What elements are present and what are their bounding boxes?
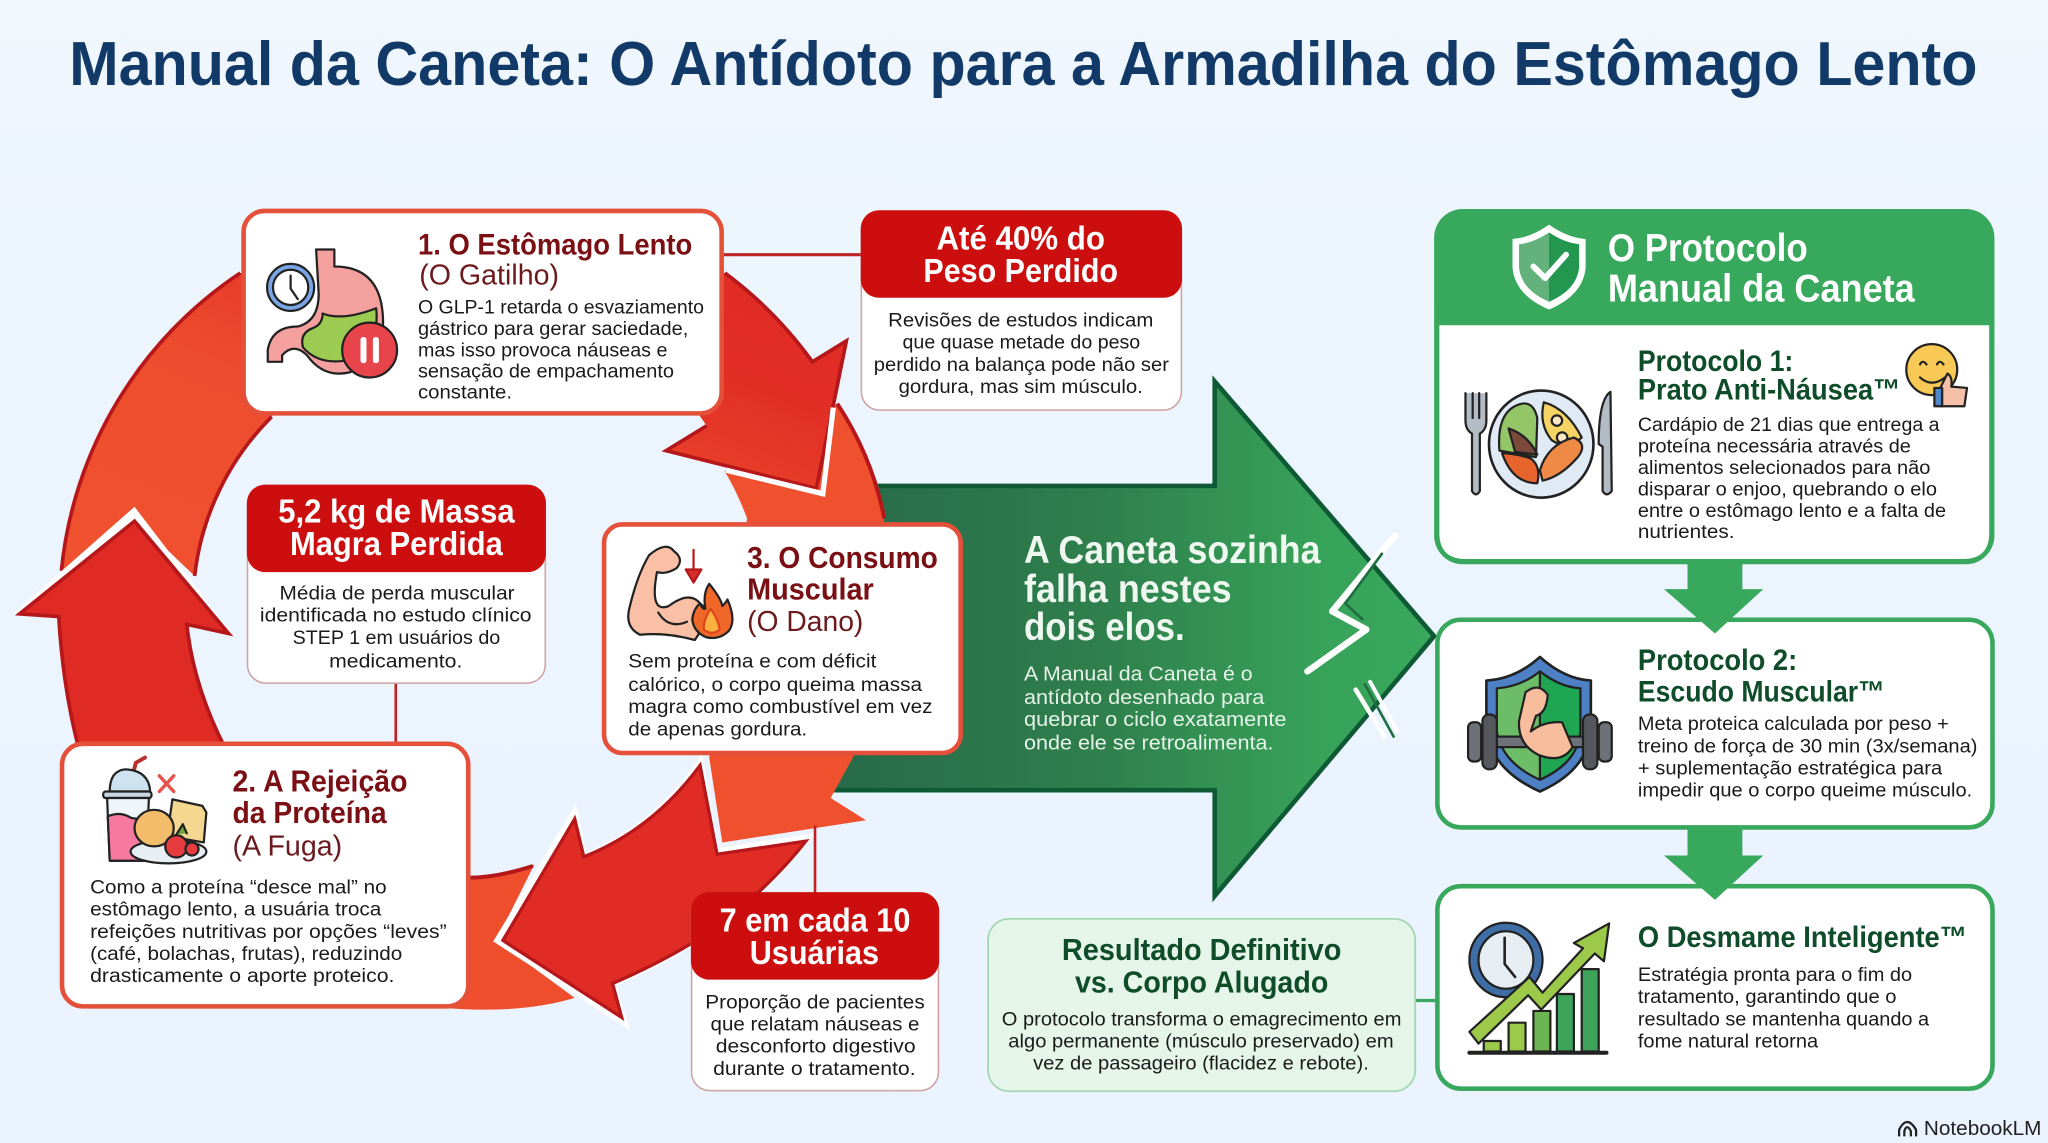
callout header: Até 40% do	[936, 220, 1105, 257]
text: card 1 body: O GLP-1 retarda o esvaziamento	[418, 296, 704, 318]
text: green arrow headline: dois elos.	[1024, 606, 1185, 649]
text: card 3 body: calórico, o corpo queima massa	[628, 674, 923, 696]
arrow: big green transition arrow	[823, 381, 1434, 896]
callout text: Revisões de estudos indicam	[888, 310, 1153, 332]
text: desmame heading: O Desmame Inteligente™	[1638, 921, 1967, 954]
text: card 3 body: Sem proteína e com déficit	[628, 650, 877, 672]
connector: result box to desmame card	[1413, 999, 1438, 1002]
text: card 3 heading: (O Dano)	[747, 606, 863, 638]
text: green arrow body: onde ele se retroalimenta.	[1024, 733, 1273, 755]
callout text	[260, 583, 532, 672]
icon: slow stomach with clock and pause	[267, 249, 397, 377]
text: protocol 2 heading	[1638, 644, 1885, 708]
text: card 1 body: mas isso provoca náuseas e	[418, 340, 667, 362]
text: desmame body: resultado se mantenha quando a	[1638, 1008, 1930, 1030]
text: card 1 subheading: (O Gatilho)	[419, 260, 559, 292]
text: card 1 body: constante.	[418, 381, 512, 403]
text: green arrow body: antídoto desenhado para	[1024, 687, 1265, 709]
icon: clock and rising chart	[1469, 923, 1609, 1053]
text: protocol 1 heading	[1638, 345, 1900, 407]
arrow: red upward arrow from card 2	[13, 507, 232, 747]
panel: 1. O Estômago Lento	[244, 211, 722, 413]
text: card 2 heading	[232, 764, 408, 863]
brand: NotebookLM: NotebookLM	[1924, 1118, 2041, 1140]
panel: Resultado Definitivo vs. Corpo Alugado	[988, 919, 1415, 1091]
text: card 1 heading: 1. O Estômago Lento	[418, 229, 692, 262]
text: desmame body	[1638, 964, 1930, 1053]
text: green arrow headline: A Caneta sozinha	[1024, 529, 1322, 572]
icon: flexed arm with flame	[628, 547, 732, 640]
text: green arrow headline: falha nestes	[1024, 568, 1232, 611]
callout: 7 em cada 10 Usuárias	[691, 892, 939, 1091]
callout header	[691, 892, 939, 980]
callout: Até 40% do Peso Perdido	[861, 210, 1182, 410]
text: card 3 body: magra como combustível em vez	[628, 696, 933, 718]
text: protocol 1 body: nutrientes.	[1638, 521, 1735, 543]
panel: O Protocolo Manual da Caneta	[1434, 209, 1994, 564]
text: card 3 body: de apenas gordura.	[628, 718, 807, 740]
text: green arrow headline	[1024, 529, 1322, 649]
callout text: STEP 1 em usuários do	[293, 627, 500, 649]
title: Manual da Caneta: O Antídoto para a Armadilha do Estômago Lento	[69, 30, 1977, 99]
text: card 1 body: gástrico para gerar saciedade,	[418, 318, 688, 340]
text: result heading	[1062, 932, 1341, 1000]
icon: balanced plate with cutlery	[1465, 391, 1612, 498]
text: card 3 heading	[747, 540, 938, 638]
text: protocol 1 body: Cardápio de 21 dias que entrega a	[1638, 414, 1941, 436]
text: card 1 body	[418, 296, 704, 403]
text: desmame body: Estratégia pronta para o fim do	[1638, 964, 1912, 986]
callout text: Média de perda muscular	[280, 583, 515, 605]
text: result heading: vs. Corpo Alugado	[1075, 965, 1328, 1000]
callout text: desconforto digestivo	[716, 1036, 916, 1058]
callout text: que quase metade do peso	[903, 332, 1140, 354]
text: protocol 2 body: impedir que o corpo queime músculo.	[1638, 780, 1972, 802]
arrow: orange tail behind card 2	[451, 865, 575, 1010]
icon: smiley thumbs up	[1906, 344, 1967, 406]
connector: lean mass callout to card 2	[395, 679, 397, 744]
text: card 2 body: drasticamente o aporte proteico.	[90, 965, 394, 987]
callout text	[705, 991, 925, 1080]
text: protocol 1 body: alimentos selecionados para não	[1638, 457, 1930, 479]
arrow: red arc towards protein rejection	[498, 763, 808, 1023]
callout text: identificada no estudo clínico	[260, 605, 532, 627]
arrow: protocol 2 to desmame	[1664, 827, 1763, 900]
text: card 2 heading: 2. A Rejeição	[232, 764, 408, 799]
text: result body: vez de passageiro (flacidez e rebote).	[1033, 1053, 1369, 1075]
text: protocol 2 body	[1638, 713, 1977, 802]
panel: 2. A Rejeição da Proteína	[62, 744, 468, 1006]
callout header: 7 em cada 10	[720, 902, 910, 939]
text: card 3 heading: Muscular	[747, 572, 874, 607]
text: card 3 heading: 3. O Consumo	[747, 540, 938, 575]
text: result body	[1002, 1008, 1401, 1075]
callout header	[247, 485, 546, 572]
text: protocol 2 body: treino de força de 30 min (3x/semana)	[1638, 735, 1977, 757]
callout text: Proporção de pacientes	[705, 991, 925, 1013]
text: desmame body: fome natural retorna	[1638, 1031, 1819, 1053]
callout text: durante o tratamento.	[713, 1058, 916, 1080]
text: green arrow body	[1024, 663, 1287, 755]
icon: smoothie and light snacks	[103, 758, 206, 863]
text: card 1 body: sensação de empachamento	[418, 360, 674, 382]
text: card 2 body	[90, 876, 447, 987]
icon: broken link lightning	[1307, 536, 1398, 737]
text: card 2 heading: (A Fuga)	[232, 831, 342, 863]
text: protocol heading: Manual da Caneta	[1608, 268, 1915, 311]
arrow: orange arc from stomach to muscle consumption	[709, 404, 884, 842]
text: result heading: Resultado Definitivo	[1062, 932, 1341, 967]
text: protocol 2 body: + suplementação estratégica para	[1638, 758, 1943, 780]
text: desmame body: tratamento, garantindo que o	[1638, 986, 1896, 1008]
callout header: Usuárias	[750, 935, 879, 972]
connector: stomach card to 40% callout	[721, 254, 865, 256]
callout text: medicamento.	[329, 650, 462, 672]
text: card 2 heading: da Proteína	[232, 795, 387, 830]
panel: 3. O Consumo Muscular	[604, 524, 961, 753]
text: protocol 1 heading: Protocolo 1:	[1638, 345, 1793, 378]
panel: O Desmame Inteligente	[1437, 886, 1992, 1089]
callout text	[874, 310, 1169, 398]
callout text: gordura, mas sim músculo.	[899, 376, 1143, 398]
callout text: que relatam náuseas e	[711, 1014, 920, 1036]
callout header	[861, 210, 1182, 298]
text: protocol 1 body: disparar o enjoo, quebrando o elo	[1638, 479, 1937, 501]
text: card 2 body: (café, bolachas, frutas), reduzindo	[90, 943, 402, 965]
text: protocol 1 body: proteína necessária através de	[1638, 436, 1911, 458]
callout header: Magra Perdida	[290, 526, 503, 563]
text: green arrow body: A Manual da Caneta é o	[1024, 663, 1253, 685]
text: card 3 body	[628, 650, 933, 740]
text: green arrow body: quebrar o ciclo exatamente	[1024, 709, 1287, 731]
text: card 2 body: Como a proteína “desce mal” no	[90, 876, 387, 898]
panel: Protocolo 2 Escudo Muscular	[1437, 620, 1992, 827]
text: protocol heading: O Protocolo	[1608, 227, 1808, 270]
text: protocol 2 heading: Escudo Muscular™	[1638, 675, 1885, 708]
arrow: protocol 1 to protocol 2	[1664, 562, 1763, 633]
text: protocol heading	[1608, 227, 1915, 311]
callout header: Peso Perdido	[923, 253, 1118, 290]
icon: shield check	[1512, 225, 1586, 310]
text: result body: algo permanente (músculo preservado) em	[1008, 1031, 1394, 1053]
text: protocol 1 body	[1638, 414, 1946, 543]
arrow: red-orange top arc from left to stomach card	[61, 273, 846, 576]
connector: 7 in 10 callout to arc	[814, 825, 816, 895]
callout header: 5,2 kg de Massa	[278, 493, 515, 530]
text: protocol 1 body: entre o estômago lento e a falta de	[1638, 500, 1946, 522]
text: card 2 body: estômago lento, a usuária troca	[90, 899, 382, 921]
callout text: perdido na balança pode não ser	[874, 354, 1169, 376]
text: protocol 2 heading: Protocolo 2:	[1638, 644, 1797, 677]
callout: 5,2 kg de Massa Magra Perdida	[247, 485, 546, 683]
icon: muscle shield with dumbbell	[1468, 657, 1612, 792]
text: result body: O protocolo transforma o emagrecimento em	[1002, 1008, 1401, 1030]
text: protocol 1 heading: Prato Anti-Náusea™	[1638, 374, 1900, 407]
text: card 2 body: refeições nutritivas por opções “leves”	[90, 921, 447, 943]
text: protocol 2 body: Meta proteica calculada por peso +	[1638, 713, 1949, 735]
